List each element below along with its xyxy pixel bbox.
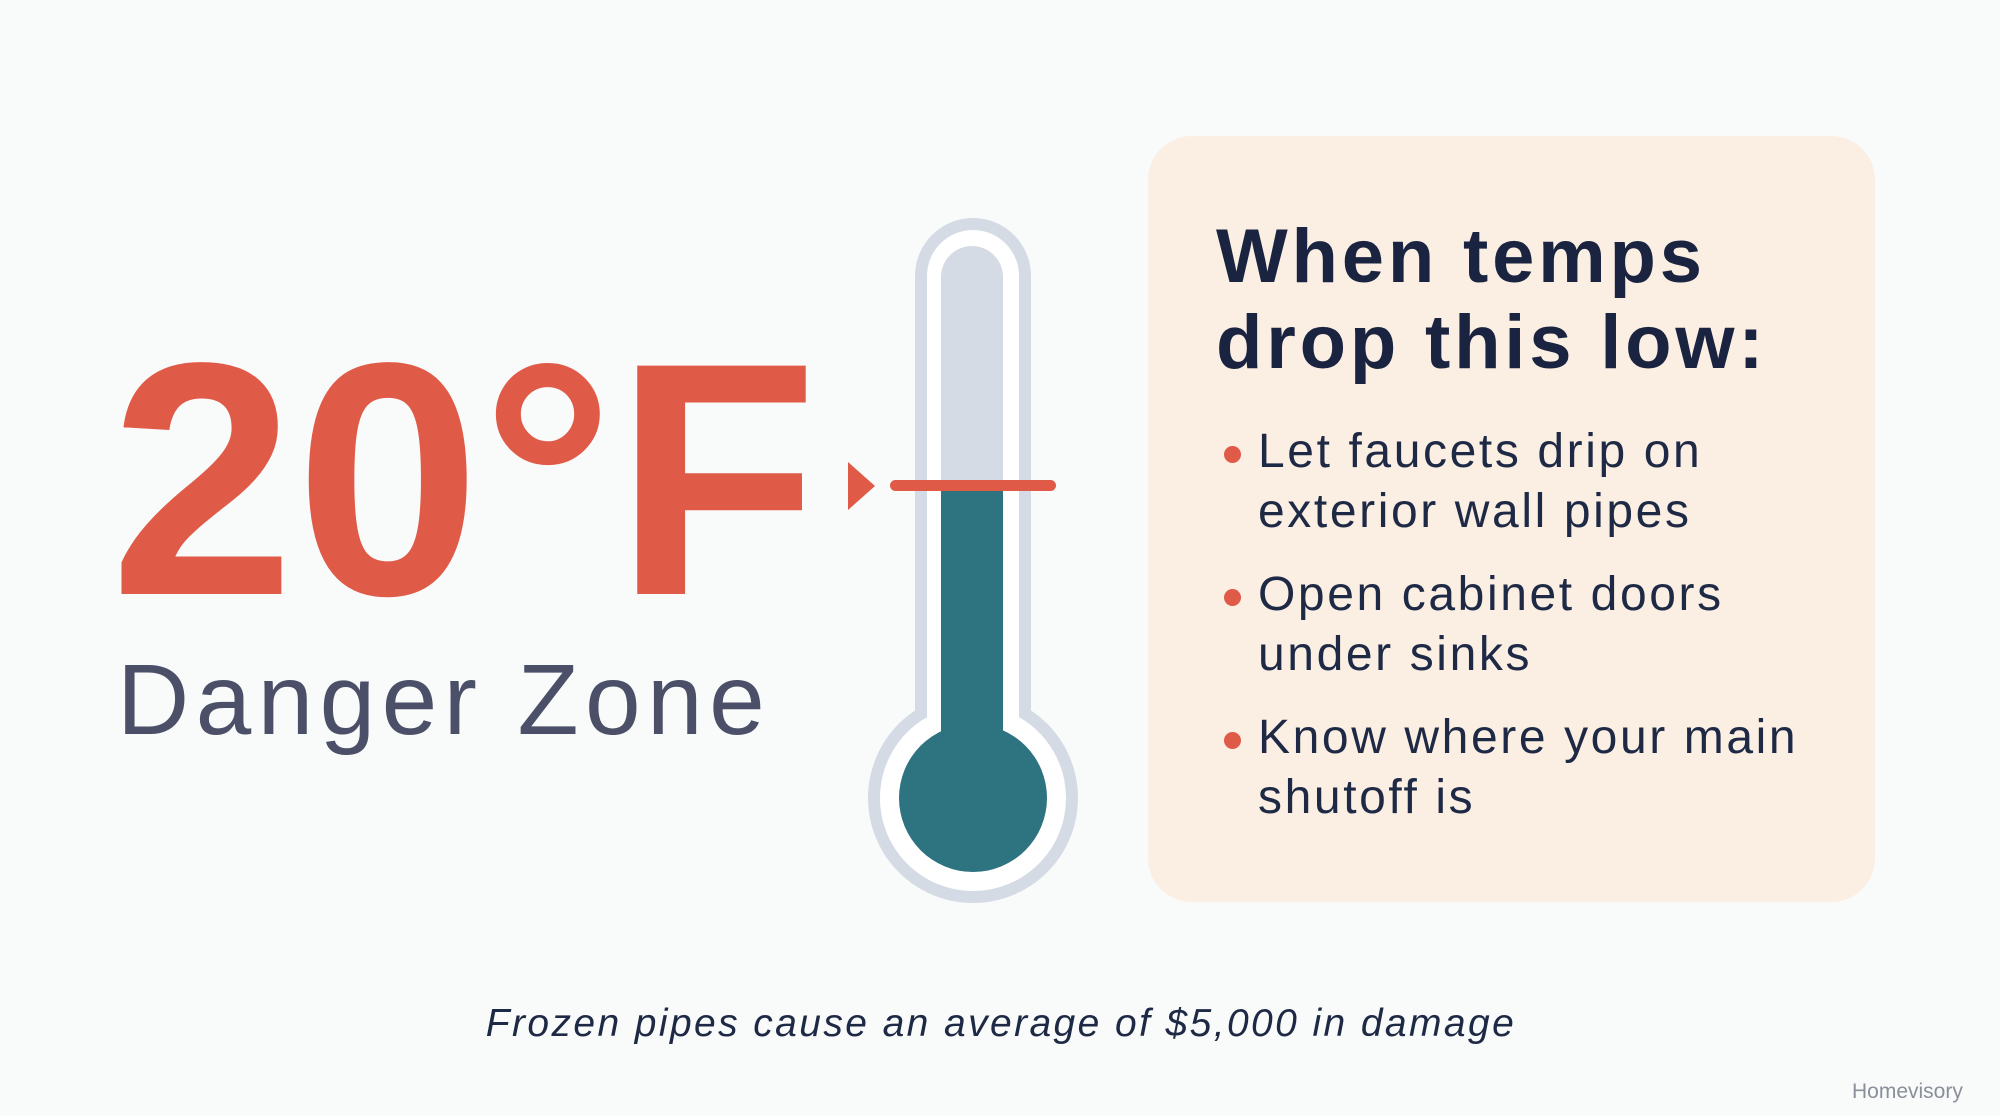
big number: 20°F: 20°F [110, 294, 819, 665]
outer tube and bulb [868, 218, 1078, 903]
thermometer [848, 218, 1078, 903]
mercury [899, 490, 1047, 872]
bullet 2: Open cabinet doors [1258, 568, 1724, 621]
bullet 3: Know where your main [1258, 711, 1798, 764]
heading [1216, 214, 1767, 385]
bullet 1 [1224, 425, 1702, 538]
bullet 2 [1224, 568, 1724, 681]
bullet list [1224, 425, 1798, 824]
bullet 3 [1224, 711, 1798, 824]
arrow pointer [848, 462, 875, 510]
panel: tips [1148, 136, 1875, 902]
bullet 2: under sinks [1258, 628, 1532, 681]
bullet 1: exterior wall pipes [1258, 485, 1692, 538]
bullet 1: Let faucets drip on [1258, 425, 1702, 478]
footer stat: Frozen pipes cause an average of $5,000 in damage [486, 1002, 1516, 1045]
subtitle: Danger Zone: Danger Zone [117, 644, 771, 756]
heading: drop this low: [1216, 300, 1767, 385]
brand: Homevisory [1852, 1080, 1963, 1103]
red level marker [890, 480, 1056, 491]
heading: When temps [1216, 214, 1706, 299]
bullet 3: shutoff is [1258, 771, 1475, 824]
